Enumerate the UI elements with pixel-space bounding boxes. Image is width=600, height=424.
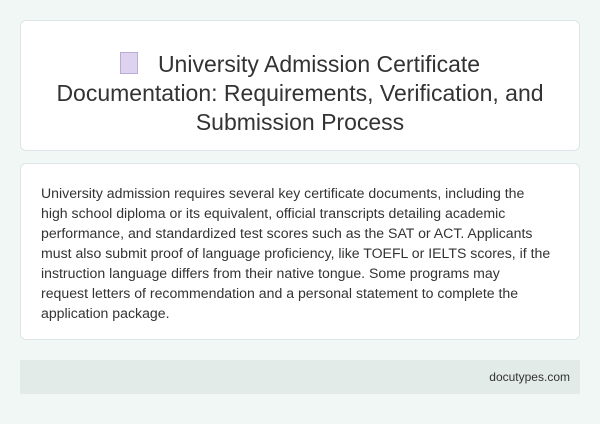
description text panel: must also submit proof of language proficiency, like TOEFL or IELTS scores, if the xyxy=(41,245,550,261)
footer xyxy=(20,360,580,394)
description text panel: high school diploma or its equivalent, official transcripts detailing academic xyxy=(41,205,505,221)
title card xyxy=(20,20,580,151)
title card: Submission Process xyxy=(196,109,404,135)
icon: document xyxy=(120,52,138,74)
description text panel: application package. xyxy=(41,305,170,321)
description text panel: performance, and standardized test scores such as the SAT or ACT. Applicants xyxy=(41,225,532,241)
footer: docutypes.com xyxy=(489,370,570,384)
description text panel: instruction language differs from their native tongue. Some programs may xyxy=(41,265,500,281)
description text panel: University admission requires several key certificate documents, including the xyxy=(41,185,524,201)
title card: University Admission Certificate xyxy=(158,51,480,77)
title card: Documentation: Requirements, Verification, and xyxy=(56,80,544,106)
description text panel xyxy=(20,163,580,340)
description text panel: request letters of recommendation and a personal statement to complete the xyxy=(41,285,518,301)
